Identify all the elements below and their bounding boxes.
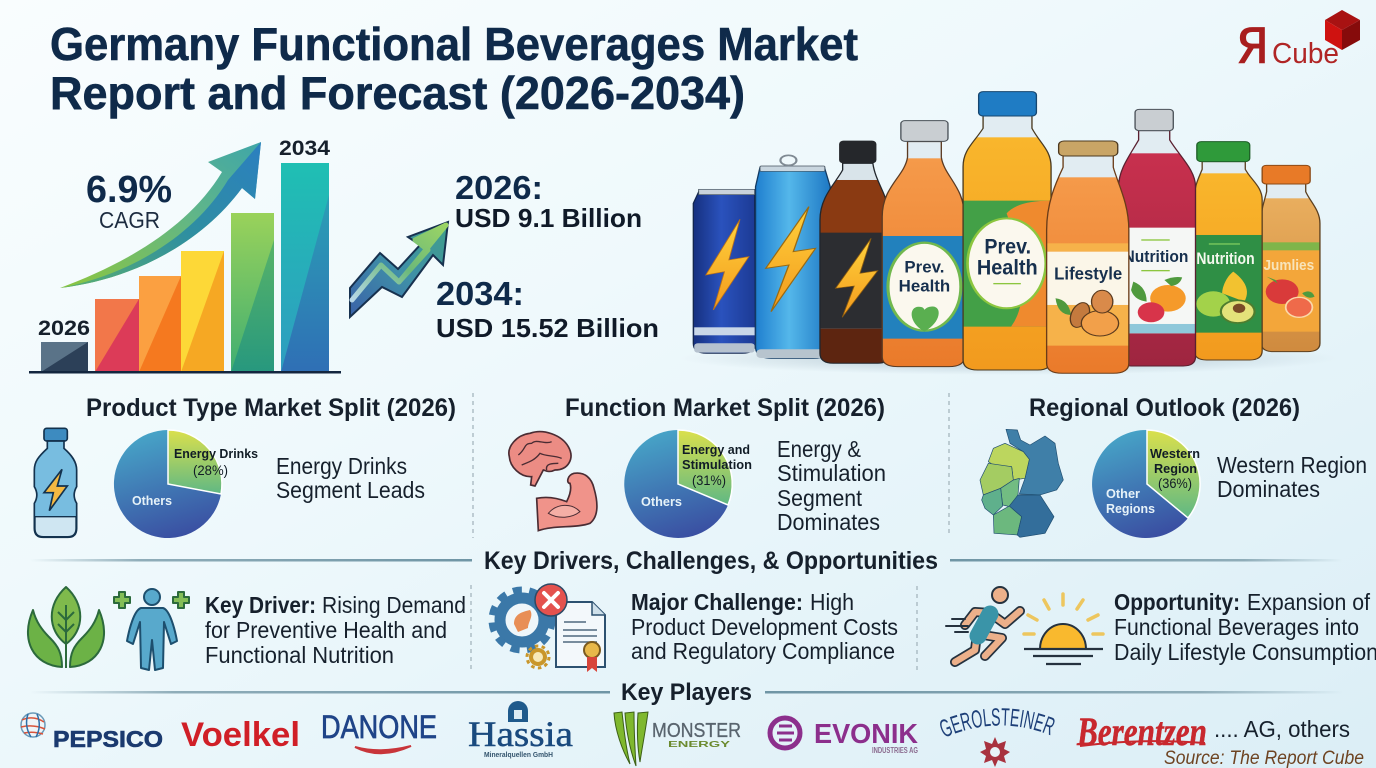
pie chart: Energy Drinks: [174, 446, 258, 461]
bottle 6 lifestyle: Lifestyle: [1054, 264, 1122, 284]
panel: function market split: [509, 394, 886, 538]
icon: gear and document: [492, 584, 605, 672]
pie chart: Region: [1154, 461, 1197, 476]
panel: key driver: [28, 587, 466, 670]
label 2034: 2034: [279, 137, 330, 160]
bottle 7 nutrition: Nutrition: [1124, 248, 1188, 266]
callout text: Stimulation: [777, 460, 886, 486]
pie chart: Other: [1106, 486, 1140, 501]
heading: key drivers: Key Drivers, Challenges, & Opportunities: [484, 547, 938, 575]
heading: Regional Outlook (2026): [1029, 394, 1300, 422]
callout text: [1217, 452, 1367, 502]
bottle 8 nutrition: Nutrition: [1196, 250, 1255, 268]
callout text: Energy &: [777, 436, 861, 462]
callout text: Dominates: [777, 509, 880, 535]
logo: Hassia: Hassia: [468, 714, 573, 754]
panel: major challenge: [492, 584, 898, 672]
bottle 5 prev health large: [960, 92, 1053, 373]
text: Rising Demand: [322, 592, 466, 618]
callout text: [276, 453, 425, 503]
pie chart: [624, 430, 752, 538]
logo: Gerolsteiner: GEROLSTEINER: [940, 708, 1055, 736]
logo: RCube: Cube: [1272, 38, 1339, 70]
illustration: beverage bottles and cans: [680, 92, 1338, 375]
text: High: [810, 589, 854, 615]
pie chart: Western: [1150, 446, 1200, 461]
text: for Preventive Health and: [205, 617, 447, 643]
text: [1114, 589, 1376, 665]
icon: leaf in hands: [28, 587, 104, 668]
bottle 9 jumlies: Jumlies: [1263, 256, 1314, 273]
CAGR value: 6.9%: [86, 169, 172, 211]
panel: opportunity: [946, 587, 1376, 665]
panel: regional outlook: [980, 394, 1367, 538]
logo: Evonik: EVONIK: [814, 718, 918, 749]
pie chart: [114, 430, 258, 538]
callout text: Segment: [777, 485, 863, 511]
icon: person with plus signs: [114, 589, 189, 670]
label 2026: 2026: [38, 317, 90, 340]
logo: Hassia: [468, 701, 573, 759]
logo: PepsiCo: [21, 713, 163, 752]
text: Major Challenge:: [631, 589, 803, 615]
logo: Hassia: Mineralquellen GmbH: [484, 750, 553, 759]
text: others: .... AG, others: [1214, 716, 1350, 742]
logo: PepsiCo: PEPSICO: [53, 726, 163, 752]
heading: key players: Key Players: [621, 679, 752, 706]
logo: Monster Energy: [614, 712, 741, 766]
market size values: USD 9.1 Billion: [455, 203, 642, 233]
text: Product Development Costs: [631, 614, 898, 640]
market size values: [436, 169, 659, 343]
can 1: [693, 189, 756, 353]
pie chart: Energy and: [682, 442, 750, 457]
logo: RCube: [1236, 10, 1360, 75]
callout text: Energy Drinks: [276, 453, 407, 479]
market size values: 2026:: [455, 169, 543, 206]
bottle 5 prev health large: Health: [977, 256, 1038, 279]
bottle 8 nutrition: [1196, 141, 1263, 360]
pie chart: Regions: [1106, 501, 1155, 516]
bottle 4 prev health: [880, 121, 969, 368]
icon: brain and flexed arm: [509, 432, 597, 531]
bottle 4 prev health: Health: [899, 277, 950, 296]
logo: Monster Energy: MONSTER: [652, 720, 741, 742]
title: [50, 18, 858, 119]
callout text: [777, 436, 886, 535]
title: Report and Forecast (2026-2034): [50, 67, 745, 119]
text: Functional Beverages into: [1114, 614, 1359, 640]
CAGR value: [86, 169, 172, 233]
bottle 9 jumlies: [1258, 165, 1322, 354]
text: Opportunity:: [1114, 589, 1240, 615]
logo: Evonik: INDUSTRIES AG: [872, 746, 918, 755]
pie chart: Others: [641, 494, 682, 509]
heading: Function Market Split (2026): [565, 394, 885, 422]
text: [631, 589, 898, 664]
pie chart: [1092, 430, 1200, 538]
bottle 7 nutrition: [1116, 109, 1198, 367]
logo: RCube: Я: [1236, 19, 1269, 75]
title: Germany Functional Beverages Market: [50, 18, 858, 70]
icon: water bottle with bolt: [34, 428, 77, 537]
icon: runner: [946, 587, 1020, 662]
text: [205, 592, 466, 668]
pie chart: (36%): [1158, 476, 1192, 491]
text: Functional Nutrition: [205, 642, 394, 668]
logo: Voelkel: Voelkel: [181, 716, 300, 754]
market size values: 2034:: [436, 275, 524, 312]
pie chart: Others: [132, 493, 172, 508]
bottle 4 prev health: Prev.: [904, 258, 944, 277]
callout text: Dominates: [1217, 476, 1320, 502]
logo: Gerolsteiner: [940, 708, 1055, 767]
logo: Evonik: [770, 718, 918, 755]
market size values: USD 15.52 Billion: [436, 313, 659, 343]
bottle 3 cola: [819, 140, 886, 364]
can 2: [756, 155, 830, 358]
growth arrow: [60, 142, 261, 288]
text: Expansion of: [1247, 589, 1371, 615]
logo: Berentzen: Berentzen: [1076, 709, 1207, 754]
bar chart: market growth: [29, 137, 341, 374]
panel: product type market split: [34, 394, 456, 538]
icon: sun on horizon: [1024, 594, 1103, 664]
CAGR value: CAGR: [99, 207, 160, 233]
pie chart: Stimulation: [682, 457, 752, 472]
icon: zigzag arrow: [350, 222, 448, 317]
pie chart: (28%): [193, 463, 228, 478]
icon: map of Germany: [980, 429, 1063, 537]
bottle 5 prev health large: Prev.: [984, 235, 1031, 258]
bottle 6 lifestyle: [1044, 141, 1131, 374]
callout text: Segment Leads: [276, 477, 425, 503]
text: Key Driver:: [205, 592, 316, 618]
logo: Monster Energy: ENERGY: [668, 740, 731, 749]
text: and Regulatory Compliance: [631, 638, 895, 664]
logo: Danone: DANONE: [321, 709, 437, 745]
pie chart: (31%): [692, 473, 726, 488]
heading: Product Type Market Split (2026): [86, 394, 456, 422]
